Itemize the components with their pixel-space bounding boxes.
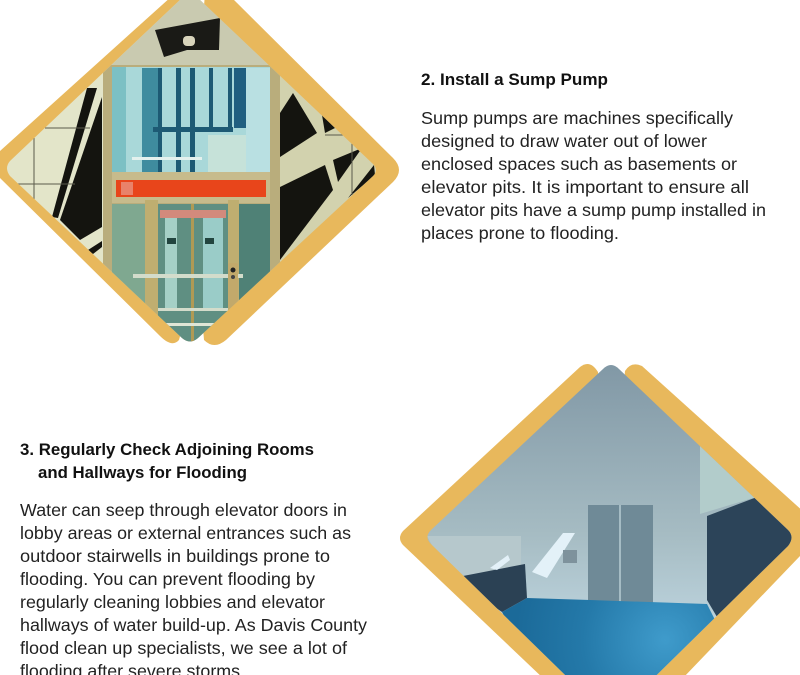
body: step 2 xyxy=(421,108,766,243)
heading: step 3: 3. Regularly Check Adjoining Rooms xyxy=(20,440,314,459)
body: step 2: enclosed spaces such as basements or xyxy=(421,154,737,174)
body: step 3: outdoor stairwells in buildings prone to xyxy=(20,546,330,566)
body: step 3: lobby areas or external entrances such as xyxy=(20,523,351,543)
body: step 3: hallways of water build-up. As Davis County xyxy=(20,615,367,635)
elevator frame xyxy=(103,65,280,350)
body: step 2: designed to draw water out of lower xyxy=(421,131,707,151)
image: glass elevator in diamond frame xyxy=(0,0,400,350)
frame: gold diamond around lobby image xyxy=(400,364,800,675)
image: blue-floored lobby in diamond frame xyxy=(420,355,800,675)
text block: Install a Sump Pump xyxy=(421,70,766,243)
body: step 2: places prone to flooding. xyxy=(421,223,619,243)
body: step 3: flooding. You can prevent flooding by xyxy=(20,569,315,589)
heading: step 2: 2. Install a Sump Pump xyxy=(421,70,608,89)
upper glass shaft xyxy=(112,67,270,172)
sunlight patches xyxy=(490,533,575,578)
blue floor xyxy=(502,598,715,675)
heading: step 3 xyxy=(20,440,314,482)
dark left counter xyxy=(463,564,527,612)
frame: gold diamond around elevator image xyxy=(0,0,399,345)
wall tile lines xyxy=(18,128,352,199)
body: step 2: elevator pits. It is important to ensure all xyxy=(421,177,749,197)
ceiling panel and security camera xyxy=(155,18,220,57)
text block: Check Adjoining Rooms xyxy=(20,440,367,675)
body: step 2: Sump pumps are machines specifically xyxy=(421,108,733,128)
elevator doors xyxy=(112,200,270,345)
heading: step 3: and Hallways for Flooding xyxy=(38,463,247,482)
upper right cabinets xyxy=(700,446,756,514)
body: step 3: Water can seep through elevator doors in xyxy=(20,500,347,520)
left glass railing xyxy=(427,536,521,576)
black wall graphics xyxy=(52,88,375,260)
red sign band xyxy=(112,172,270,203)
body: step 2: elevator pits have a sump pump installed in xyxy=(421,200,766,220)
dark right cabinets xyxy=(707,497,795,622)
body: step 3: regularly cleaning lobbies and elevator xyxy=(20,592,325,612)
elevator door xyxy=(588,505,653,603)
body: step 3 xyxy=(20,500,367,675)
body: step 3: flood clean up specialists, we see a lot of xyxy=(20,638,347,658)
wall panel xyxy=(563,550,577,563)
